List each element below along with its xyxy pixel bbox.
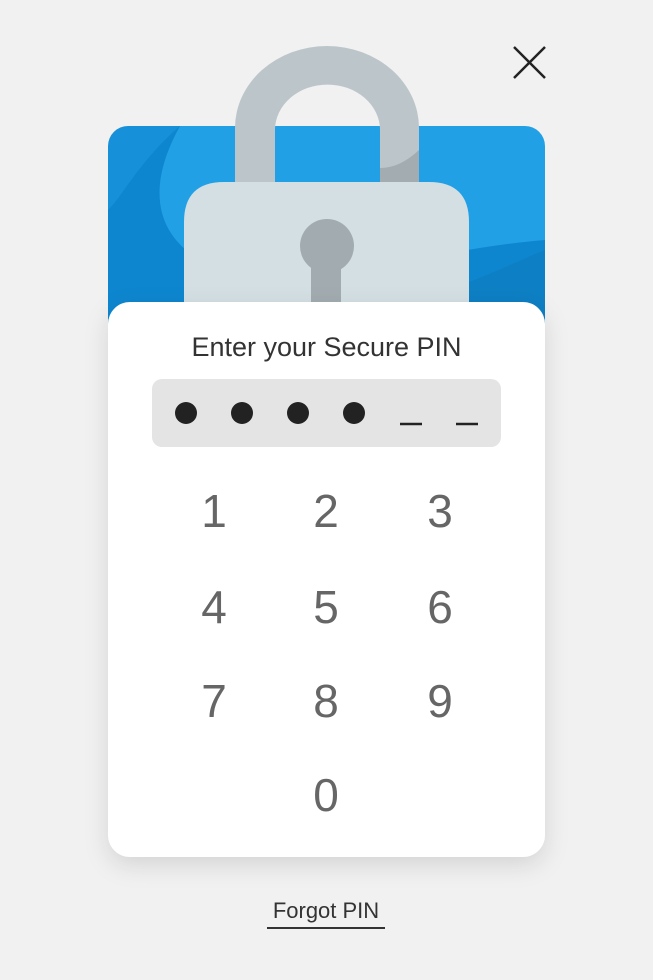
keypad digits: 1 (201, 485, 227, 537)
keypad digits: 5 (313, 581, 339, 633)
keypad digits: 2 (313, 485, 339, 537)
keypad digits: 9 (427, 675, 453, 727)
forgot pin link: Forgot PIN (273, 898, 379, 923)
keypad digits: 6 (427, 581, 453, 633)
white keypad panel (108, 302, 545, 857)
keypad digits: 8 (313, 675, 339, 727)
blue header panel (108, 126, 545, 324)
padlock (184, 46, 469, 302)
keypad digits: 7 (201, 675, 227, 727)
keypad digits (201, 485, 453, 821)
lock card illustration (101, 46, 552, 872)
heading: Enter your Secure PIN (191, 332, 462, 362)
close icon (513, 46, 546, 79)
pin input field (152, 379, 501, 447)
keypad digits: 4 (201, 581, 227, 633)
keypad digits: 0 (313, 769, 339, 821)
keypad digits: 3 (427, 485, 453, 537)
